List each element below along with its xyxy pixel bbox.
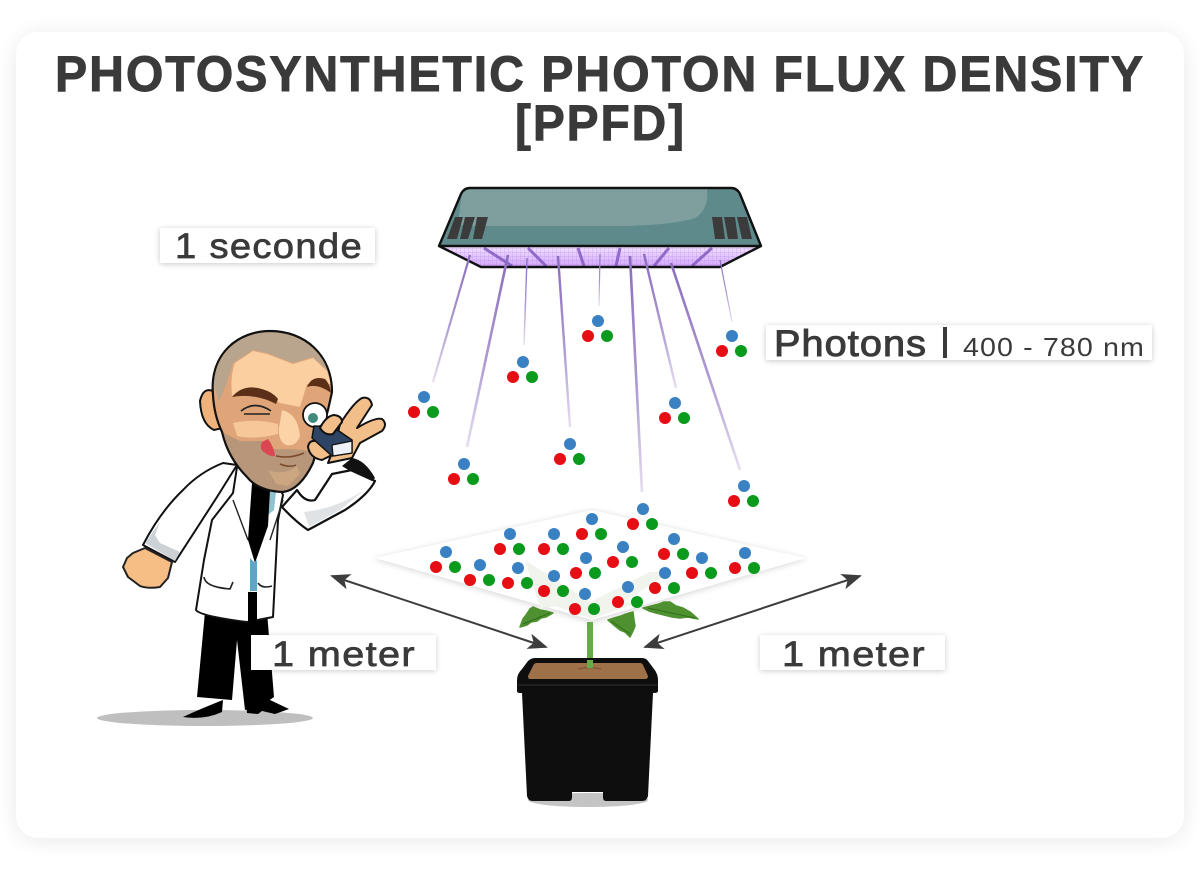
lab coat body <box>196 467 283 622</box>
scientist character <box>97 331 385 726</box>
grow lamp <box>439 188 761 267</box>
ground shadow <box>97 710 313 726</box>
title: PHOTOSYNTHETIC PHOTON FLUX DENSITY <box>55 46 1145 102</box>
leaf veins <box>523 608 695 634</box>
label: photons <box>766 323 1152 364</box>
tie <box>248 483 270 563</box>
hand and fingers <box>328 398 385 463</box>
lamp vents <box>447 217 752 239</box>
beard <box>222 432 316 492</box>
soil <box>528 663 648 679</box>
loupe <box>312 426 352 456</box>
thumb <box>308 441 332 460</box>
black cuff <box>342 458 375 481</box>
arrow: right 1 meter <box>645 576 860 647</box>
label: photons: 400 - 780 nm <box>963 332 1145 362</box>
index finger <box>320 415 342 434</box>
label: right 1 meter: 1 meter <box>782 635 926 674</box>
pot <box>517 658 658 801</box>
label: left 1 meter <box>251 635 436 674</box>
falling photon triplets <box>408 315 759 507</box>
label: right 1 meter <box>760 635 945 674</box>
pot shadow <box>528 793 648 807</box>
title: [PPFD] <box>515 95 686 151</box>
photon triplets on the square <box>430 503 760 615</box>
coat pockets <box>204 577 272 589</box>
label: photons: Photons <box>774 323 927 364</box>
scalp <box>214 332 331 402</box>
forehead light <box>231 351 331 407</box>
shirt placket <box>250 558 257 591</box>
shoes <box>183 700 289 718</box>
plant in pot <box>517 560 698 807</box>
white collar lines <box>233 500 283 540</box>
illuminated square area <box>372 510 808 623</box>
tongue and mouth <box>261 439 275 456</box>
ear <box>200 390 223 430</box>
winking eye <box>241 406 271 414</box>
title <box>55 46 1145 151</box>
left fist <box>123 548 172 588</box>
head <box>213 331 332 492</box>
faint leaves behind the square <box>525 560 670 619</box>
nose <box>279 410 300 445</box>
hand with loupe <box>308 398 385 463</box>
leaves <box>520 602 698 637</box>
label: left 1 meter: 1 meter <box>272 635 416 674</box>
open eye <box>303 403 327 427</box>
chin highlight <box>268 466 300 486</box>
raised arm sleeve <box>282 470 375 530</box>
shirt collar <box>268 488 276 515</box>
trousers <box>197 612 274 710</box>
label: 1 seconde: 1 seconde <box>175 227 363 266</box>
light rays <box>433 254 740 492</box>
cheek highlight <box>233 421 278 438</box>
eyebrows <box>232 387 278 404</box>
head outline <box>213 331 332 492</box>
lamp underside panel <box>439 246 761 267</box>
left arm sleeve <box>143 463 237 562</box>
lamp housing <box>439 188 761 246</box>
stem <box>587 622 593 668</box>
arrow: left 1 meter <box>332 576 546 647</box>
